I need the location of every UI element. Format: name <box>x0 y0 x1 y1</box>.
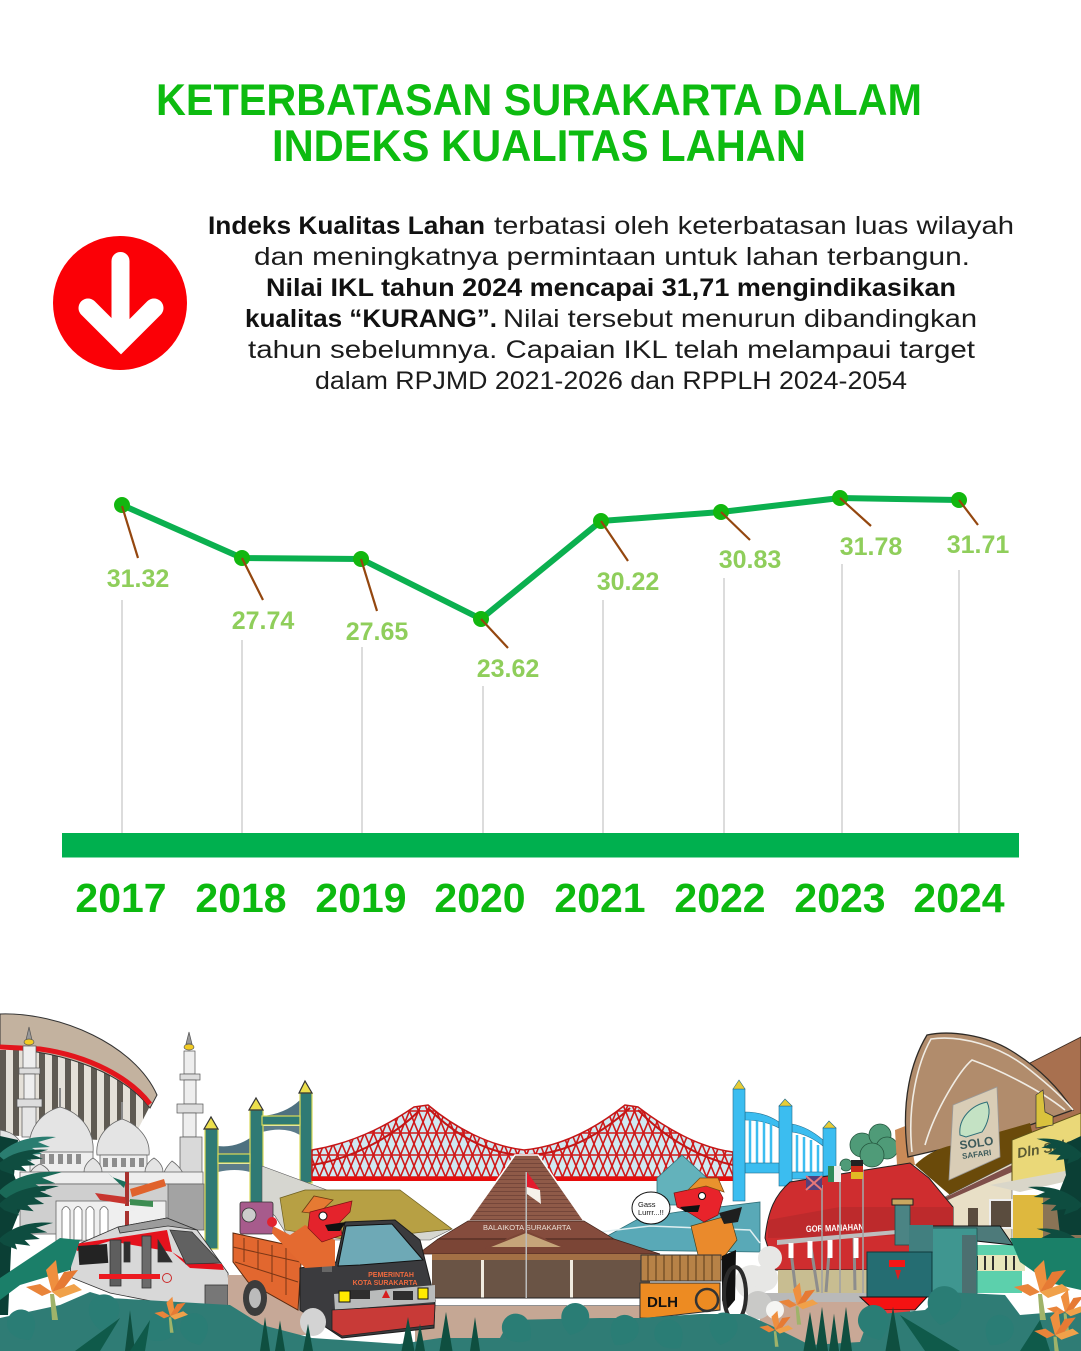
title <box>156 76 922 171</box>
Solo Safari building: Dln Solo <box>1016 1135 1075 1161</box>
text block: description: dan meningkatnya permintaan untuk lahan terbangun. <box>254 243 970 271</box>
right mascot with DLH cart <box>632 1178 746 1321</box>
mosque body <box>20 1172 204 1241</box>
value labels: 31.78 <box>840 533 902 561</box>
birds of paradise <box>26 1260 1081 1351</box>
domes <box>0 1107 184 1178</box>
speaker <box>240 1202 273 1234</box>
leaves <box>2 1283 1019 1351</box>
trees behind GOR <box>840 1124 898 1171</box>
vertical guide lines <box>122 564 959 833</box>
Solo Safari building <box>895 1033 1081 1240</box>
flags <box>806 1160 863 1293</box>
text block: description: Nilai IKL tahun 2024 mencapai 31,71 mengindikasikan <box>266 274 956 302</box>
data points <box>114 490 967 627</box>
data line <box>122 498 959 619</box>
teal base <box>0 1292 1081 1351</box>
speech bubble <box>632 1192 670 1224</box>
dump truck <box>228 1196 435 1338</box>
truck cab <box>300 1220 435 1338</box>
stadium <box>0 1014 157 1140</box>
value labels: 30.83 <box>719 546 781 574</box>
GOR Manahan: GOR MANAHAN <box>806 1222 864 1234</box>
right palm fronds <box>1010 1136 1081 1290</box>
value labels: 27.74 <box>232 607 294 635</box>
blue gate <box>733 1080 836 1201</box>
sign: Solo Safari <box>949 1087 1000 1180</box>
icon: red circle with down arrow <box>53 236 187 370</box>
mascot body <box>691 1215 737 1262</box>
joglo hall <box>415 1155 660 1351</box>
text block: description <box>208 212 1014 395</box>
value labels: 31.32 <box>107 565 169 593</box>
green gate <box>204 1081 312 1249</box>
train-side teal building and locomotive <box>860 1199 1025 1335</box>
ground under truck <box>228 1275 318 1335</box>
value labels: 23.62 <box>477 655 539 683</box>
axis bar <box>62 833 1019 858</box>
text block: description: dalam RPJMD 2021-2026 dan RPPLH 2024-2054 <box>315 367 907 395</box>
right mascot with DLH cart: DLH <box>647 1294 678 1311</box>
line chart <box>107 490 1009 833</box>
year labels: 2022 <box>674 875 766 921</box>
speech bubble: Gass <box>638 1200 656 1209</box>
red bridge <box>312 1105 733 1181</box>
sign: Solo Safari: SAFARI <box>961 1148 992 1161</box>
GOR Manahan <box>760 1160 953 1302</box>
mosque windows <box>40 1154 144 1167</box>
text block: description: Nilai tersebut menurun dibandingkan <box>503 305 977 333</box>
ground by GOR <box>760 1300 880 1351</box>
left palm fronds <box>0 1136 80 1315</box>
illustration: Surakarta skyline <box>0 1014 1081 1351</box>
mascot head <box>674 1183 723 1222</box>
gold palace roof <box>262 1166 452 1240</box>
cart <box>641 1255 721 1281</box>
sign: Solo Safari: SOLO <box>959 1134 994 1152</box>
foreground foliage <box>0 1260 1081 1351</box>
year labels: 2023 <box>794 875 886 921</box>
text block: description: tahun sebelumnya. Capaian IKL telah melampaui target <box>248 336 975 364</box>
title: KETERBATASAN SURAKARTA DALAM <box>156 76 922 125</box>
text block: description: Indeks Kualitas Lahan <box>208 212 485 240</box>
text block: description: kualitas “KURANG”. <box>245 305 497 333</box>
dump truck: KOTA SURAKARTA <box>353 1280 417 1287</box>
value labels <box>107 531 1009 683</box>
cream and yellow buildings <box>945 1163 1012 1240</box>
leader lines <box>122 498 978 648</box>
year labels: 2018 <box>195 875 287 921</box>
speech bubble: Lurrr...!! <box>638 1208 664 1217</box>
dark spikes <box>125 1307 900 1351</box>
text block: description: terbatasi oleh keterbatasan luas wilayah <box>494 212 1014 240</box>
value labels: 30.22 <box>597 568 659 596</box>
year labels: 2019 <box>315 875 407 921</box>
smoke <box>735 1246 784 1319</box>
value labels: 27.65 <box>346 618 408 646</box>
truck bed <box>233 1233 302 1310</box>
bicycle wheel <box>724 1267 746 1321</box>
year labels: 2020 <box>434 875 526 921</box>
street sign <box>95 1172 166 1228</box>
title: INDEKS KUALITAS LAHAN <box>272 122 806 171</box>
year labels: 2017 <box>75 875 167 921</box>
right minaret <box>177 1032 203 1173</box>
teal pavilion <box>600 1155 760 1252</box>
year labels <box>75 875 1005 921</box>
dump truck: PEMERINTAH <box>368 1272 414 1279</box>
train <box>70 1218 230 1310</box>
mosque <box>0 1027 204 1241</box>
left driver mascot <box>267 1196 352 1268</box>
value labels: 31.71 <box>947 531 1009 559</box>
joglo hall: BALAIKOTA SURAKARTA <box>483 1223 571 1232</box>
year labels: 2024 <box>913 875 1005 921</box>
year labels: 2021 <box>554 875 646 921</box>
left minaret <box>17 1027 42 1137</box>
